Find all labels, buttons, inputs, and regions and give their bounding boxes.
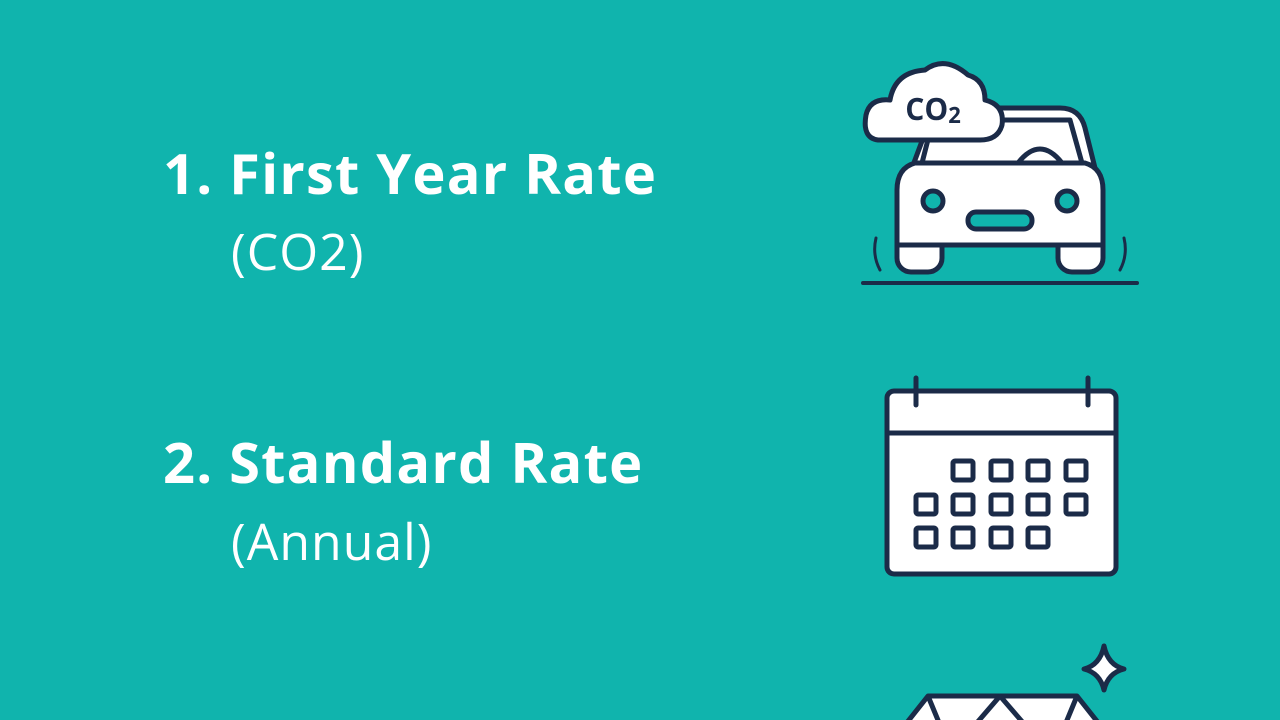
icon: calendar [887,378,1116,574]
icon: car with CO2 cloud: CO [905,88,948,129]
heading: first year rate: 1. First Year Rate [163,135,657,211]
subheading: annual: (Annual) [231,507,433,575]
icon: car with CO2 cloud: 2 [948,100,961,130]
heading: standard rate: 2. Standard Rate [163,424,643,500]
icon: car with CO2 cloud [863,64,1137,283]
subheading: CO2: (CO2) [231,217,364,285]
icon: diamond with sparkle [905,646,1124,720]
